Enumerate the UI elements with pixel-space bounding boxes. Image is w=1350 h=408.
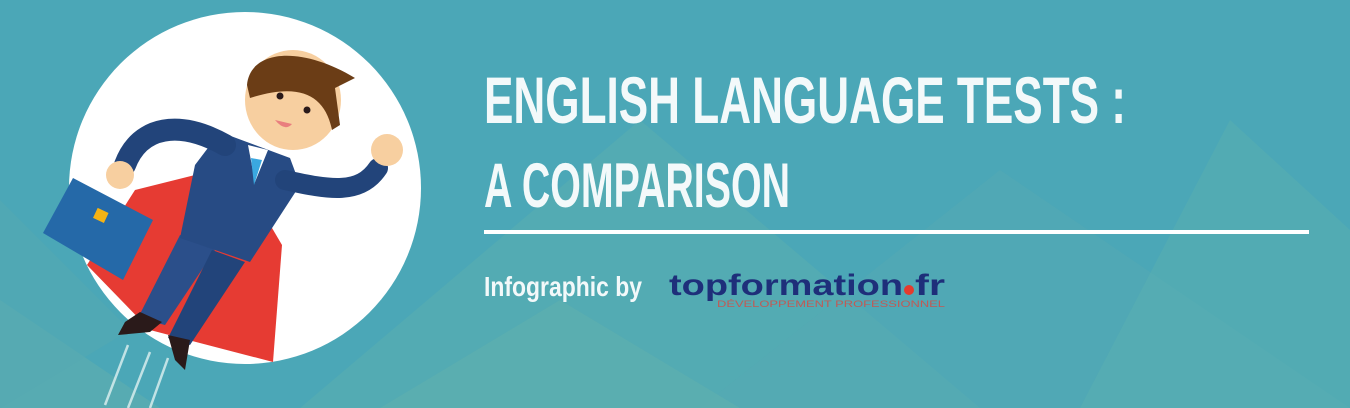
left arm	[125, 130, 225, 165]
speed lines	[105, 345, 168, 408]
title: A COMPARISON	[484, 151, 790, 221]
logo: topformation.fr: DÉVELOPPEMENT PROFESSIONNEL	[717, 299, 945, 309]
logo: topformation.fr	[669, 269, 945, 309]
logo: topformation.fr: topformation	[669, 269, 903, 302]
cape	[87, 165, 282, 362]
divider	[484, 230, 1309, 234]
credit	[484, 269, 945, 309]
credit: Infographic by	[484, 271, 642, 302]
briefcase	[106, 161, 134, 189]
logo: topformation.fr: fr	[915, 269, 945, 302]
illustration: flying businessman	[43, 12, 421, 408]
title	[484, 63, 1126, 221]
head	[245, 50, 341, 150]
body	[180, 132, 300, 262]
right arm	[285, 168, 378, 188]
shirt and tie	[248, 145, 268, 182]
legs	[138, 235, 215, 325]
